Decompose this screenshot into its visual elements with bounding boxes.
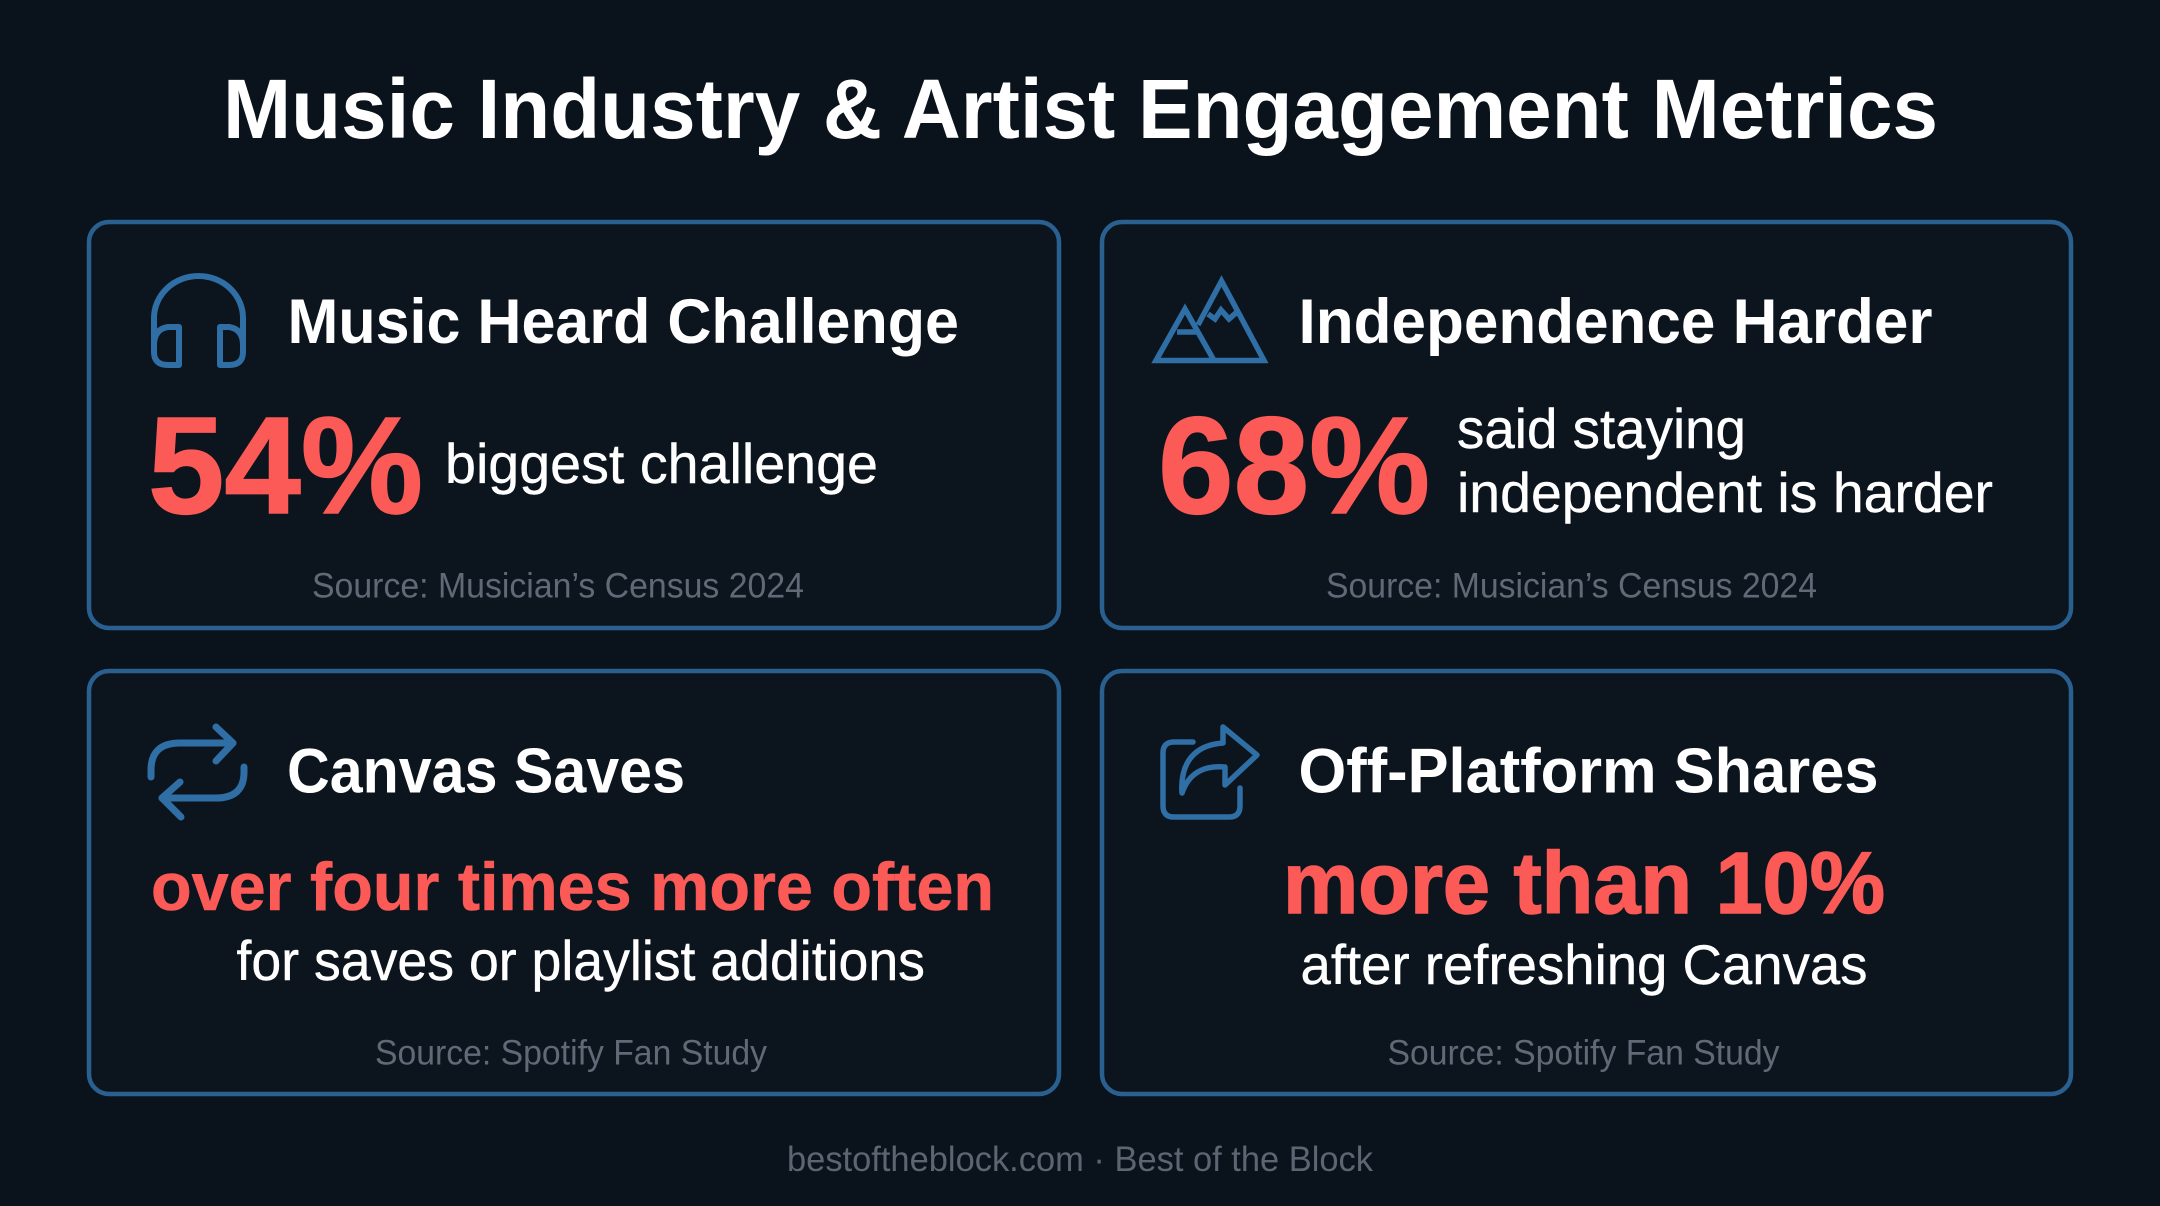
icon: mountains	[1156, 281, 1264, 360]
title: Music Industry & Artist Engagement Metrics	[223, 62, 1938, 156]
card border	[89, 222, 1059, 628]
panel: Music Heard Challenge	[89, 222, 1059, 628]
card border	[89, 671, 1059, 1094]
stat description: for saves or playlist additions	[236, 929, 925, 992]
highlight: more than 10%: more than 10%	[1283, 835, 1885, 932]
stat: 68%: 68%	[1158, 389, 1430, 543]
icon: share arrow	[1163, 727, 1257, 817]
source: Source: Spotify Fan Study	[1388, 1034, 1780, 1072]
stat description	[1457, 397, 1993, 524]
heading: Independence Harder	[1298, 287, 1932, 357]
stat description: biggest challenge	[445, 432, 878, 495]
heading: Music Heard Challenge	[288, 287, 959, 357]
icon: headphones	[154, 276, 243, 365]
heading: Off-Platform Shares	[1298, 736, 1878, 806]
card border	[1102, 671, 2071, 1094]
panel: Independence Harder	[1102, 222, 2071, 628]
heading: Canvas Saves	[287, 736, 685, 806]
panel: Off-Platform Shares	[1102, 671, 2071, 1094]
panel: Canvas Saves	[89, 671, 1059, 1094]
footer: bestoftheblock.com · Best of the Block	[787, 1140, 1373, 1179]
source: Source: Spotify Fan Study	[375, 1034, 767, 1072]
stat: 54%: 54%	[148, 389, 423, 543]
stat description: said staying	[1457, 397, 1746, 460]
highlight: over four times more often: over four times more often	[151, 849, 994, 925]
stat description: independent is harder	[1457, 461, 1993, 524]
source: Source: Musician’s Census 2024	[312, 566, 804, 606]
card border	[1102, 222, 2071, 628]
icon: repeat arrows	[151, 727, 244, 817]
stat description: after refreshing Canvas	[1300, 933, 1868, 996]
source: Source: Musician’s Census 2024	[1326, 566, 1817, 606]
